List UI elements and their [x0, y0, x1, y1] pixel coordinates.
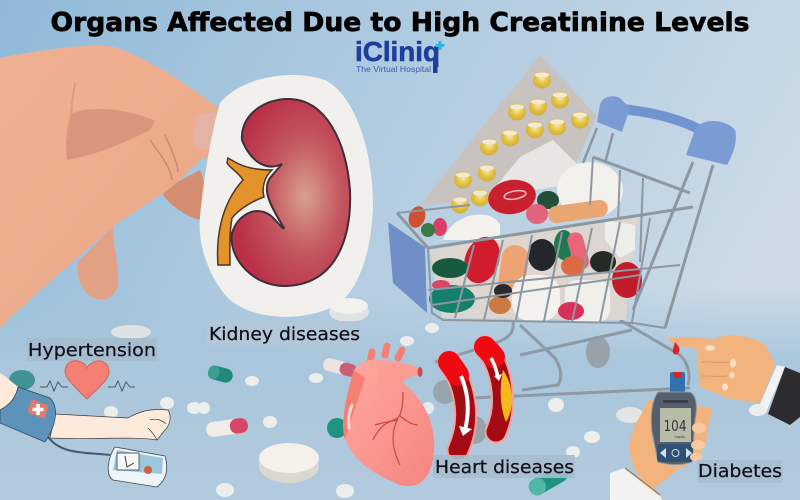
label: kidney diseases: Kidney diseases — [209, 324, 360, 345]
hand holding kidney — [0, 46, 235, 328]
label: heart diseases: Heart diseases — [435, 457, 574, 478]
icon: heart with pulse lines — [40, 361, 135, 399]
title: Organs Affected Due to High Creatinine Levels — [50, 8, 750, 38]
shopping cart with medicines — [388, 55, 736, 444]
label: hypertension: Hypertension — [28, 340, 156, 361]
cart lower frame and wheels — [433, 320, 690, 444]
scattered pills — [9, 298, 644, 498]
label: diabetes: Diabetes — [698, 461, 782, 482]
illustration: hand with glucose meter: mg/dL — [675, 435, 686, 439]
blister pack — [420, 55, 597, 214]
blue panel — [388, 222, 427, 313]
iCliniq logo: iCliniq — [355, 36, 440, 67]
illustration: pointing hand — [668, 336, 800, 425]
illustration: blood pressure arm and monitor — [0, 373, 170, 487]
kidney drawing on paper — [200, 75, 373, 317]
illustration: heart — [343, 346, 434, 486]
foil and basket contents — [406, 140, 642, 322]
blue handle — [597, 96, 736, 165]
illustration: arteries — [449, 347, 512, 450]
iCliniq logo: The Virtual Hospital — [356, 65, 431, 74]
basket wire — [397, 128, 713, 328]
illustration: hand with glucose meter: 104 — [664, 417, 686, 435]
illustration: hand with glucose meter — [610, 372, 712, 500]
